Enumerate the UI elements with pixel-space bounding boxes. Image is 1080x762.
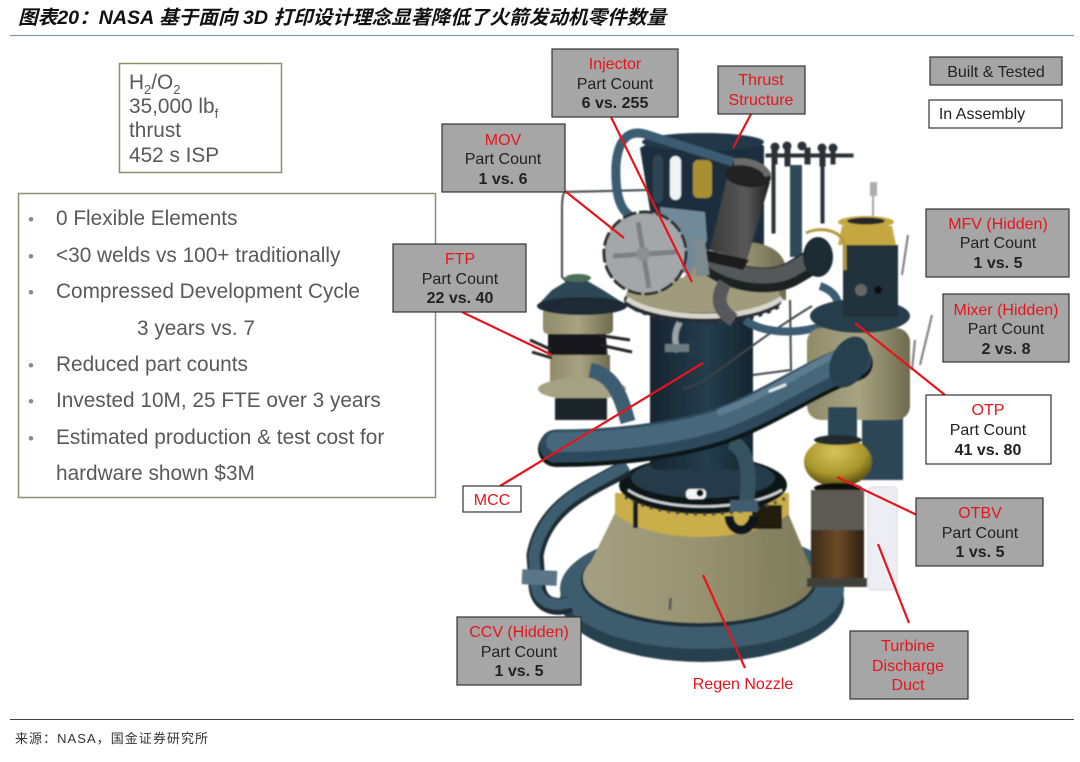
panel: program highlights: • <box>28 429 34 448</box>
callout: thrust structure: Structure <box>729 92 794 109</box>
panel: program highlights: <30 welds vs 100+ traditionally <box>56 244 341 267</box>
callout: MOV: MOV <box>485 132 522 149</box>
callout: thrust structure <box>718 66 805 114</box>
panel: program highlights: • <box>28 283 34 302</box>
actuator cylinder <box>691 162 772 277</box>
callout: regen nozzle: Regen Nozzle <box>693 676 793 693</box>
panel: engine specifications: 2 <box>173 82 180 97</box>
column fitting <box>665 322 689 352</box>
panel: program highlights: Compressed Development Cycle <box>56 280 360 303</box>
combustion chamber column <box>650 305 753 470</box>
rocket engine illustration <box>522 133 932 662</box>
panel: program highlights: • <box>28 356 34 375</box>
callout: MCC <box>463 486 521 512</box>
callout: injector: 6 vs. 255 <box>582 95 648 112</box>
callout: MOV: Part Count <box>465 151 542 168</box>
panel: program highlights: • <box>28 247 34 266</box>
callout: injector: Part Count <box>577 76 654 93</box>
callout: FTP: FTP <box>445 251 475 268</box>
panel: program highlights: 0 Flexible Elements <box>56 207 237 230</box>
panel: engine specifications: /O <box>151 71 173 94</box>
injector dome and flange <box>624 242 786 322</box>
callout: MFV: 1 vs. 5 <box>974 255 1023 272</box>
callout: FTP: 22 vs. 40 <box>427 290 493 307</box>
callout: OTP: Part Count <box>950 422 1027 439</box>
panel: engine specifications: 2 <box>144 82 151 97</box>
source note: 来源：NASA，国金证券研究所 <box>15 731 208 746</box>
panel: engine specifications: thrust <box>129 119 181 142</box>
top instrument manifold <box>766 142 853 257</box>
MOV valve disc <box>604 207 707 294</box>
panel: program highlights: • <box>28 210 34 229</box>
panel: engine specifications: f <box>215 106 219 121</box>
callout: MFV <box>926 209 1069 277</box>
callout: OTP: 41 vs. 80 <box>955 442 1021 459</box>
callout: mixer: 2 vs. 8 <box>982 341 1031 358</box>
brown turbine housing <box>807 490 867 587</box>
panel: program highlights: Estimated production & test cost for <box>56 426 384 449</box>
callout: OTBV: 1 vs. 5 <box>956 544 1005 561</box>
callout: thrust structure: Thrust <box>738 72 784 89</box>
callout: injector: Injector <box>589 56 642 73</box>
panel: program highlights <box>18 194 436 498</box>
callout: CCV: 1 vs. 5 <box>495 663 544 680</box>
large crossover duct <box>556 330 877 449</box>
black flange ring <box>619 456 788 514</box>
panel: engine specifications <box>120 64 282 172</box>
callout: OTBV: OTBV <box>958 505 1002 522</box>
left fuel turbopump FTP <box>530 274 632 422</box>
panel: program highlights: 3 years vs. 7 <box>137 317 255 340</box>
callout: CCV: Part Count <box>481 644 558 661</box>
legend: built and tested: Built & Tested <box>947 64 1045 81</box>
callout: MFV: Part Count <box>960 235 1037 252</box>
title: 图表20：NASA 基于面向 3D 打印设计理念显著降低了火箭发动机零件数量 <box>18 7 669 29</box>
white turbine discharge duct <box>868 487 897 590</box>
base ring <box>560 529 844 662</box>
thrust structure <box>640 133 764 250</box>
callout: OTP <box>926 395 1051 464</box>
panel: engine specifications: 35,000 lb <box>129 95 215 118</box>
callout: mixer: Part Count <box>968 321 1045 338</box>
callout: mixer <box>943 294 1069 362</box>
panel: engine specifications: 452 s ISP <box>129 144 219 167</box>
callout: mixer: Mixer (Hidden) <box>954 302 1058 319</box>
callout: CCV: CCV (Hidden) <box>469 624 569 641</box>
legend: in assembly <box>929 100 1062 128</box>
callout: OTBV: Part Count <box>942 525 1019 542</box>
panel: program highlights: hardware shown $3M <box>56 462 255 485</box>
legend: built and tested <box>930 57 1062 85</box>
callout: OTP: OTP <box>972 402 1004 419</box>
red leader lines <box>462 114 945 668</box>
lower S pipe <box>522 465 627 606</box>
yellow band <box>615 493 789 537</box>
nozzle <box>583 513 815 623</box>
oxidizer line pipe top <box>616 133 733 218</box>
callout: injector <box>552 49 678 117</box>
nozzle feed pipe <box>729 442 758 530</box>
callout: turbine discharge duct: Duct <box>892 677 925 694</box>
panel: program highlights: Invested 10M, 25 FTE over 3 years <box>56 389 381 412</box>
yellow ball valve OTBV <box>804 407 872 493</box>
callout: turbine discharge duct: Discharge <box>872 658 944 675</box>
callout: MOV <box>442 124 565 192</box>
callout: FTP: Part Count <box>422 271 499 288</box>
right oxidizer turbopump body <box>803 182 932 480</box>
panel: engine specifications: H <box>129 71 144 94</box>
callout: turbine discharge duct: Turbine <box>881 638 935 655</box>
callout: turbine discharge duct <box>850 631 968 699</box>
callout: MOV: 1 vs. 6 <box>479 171 528 188</box>
callout: FTP <box>393 244 526 312</box>
callout: OTBV <box>916 498 1043 566</box>
callout: MFV: MFV (Hidden) <box>948 216 1048 233</box>
panel: program highlights: Reduced part counts <box>56 353 248 376</box>
dark fuel valve pipe <box>707 252 838 332</box>
callout: MCC: MCC <box>474 492 510 509</box>
thin tubing <box>562 190 812 388</box>
panel: program highlights: • <box>28 392 34 411</box>
legend: in assembly: In Assembly <box>939 106 1025 123</box>
callout: CCV <box>457 617 581 685</box>
